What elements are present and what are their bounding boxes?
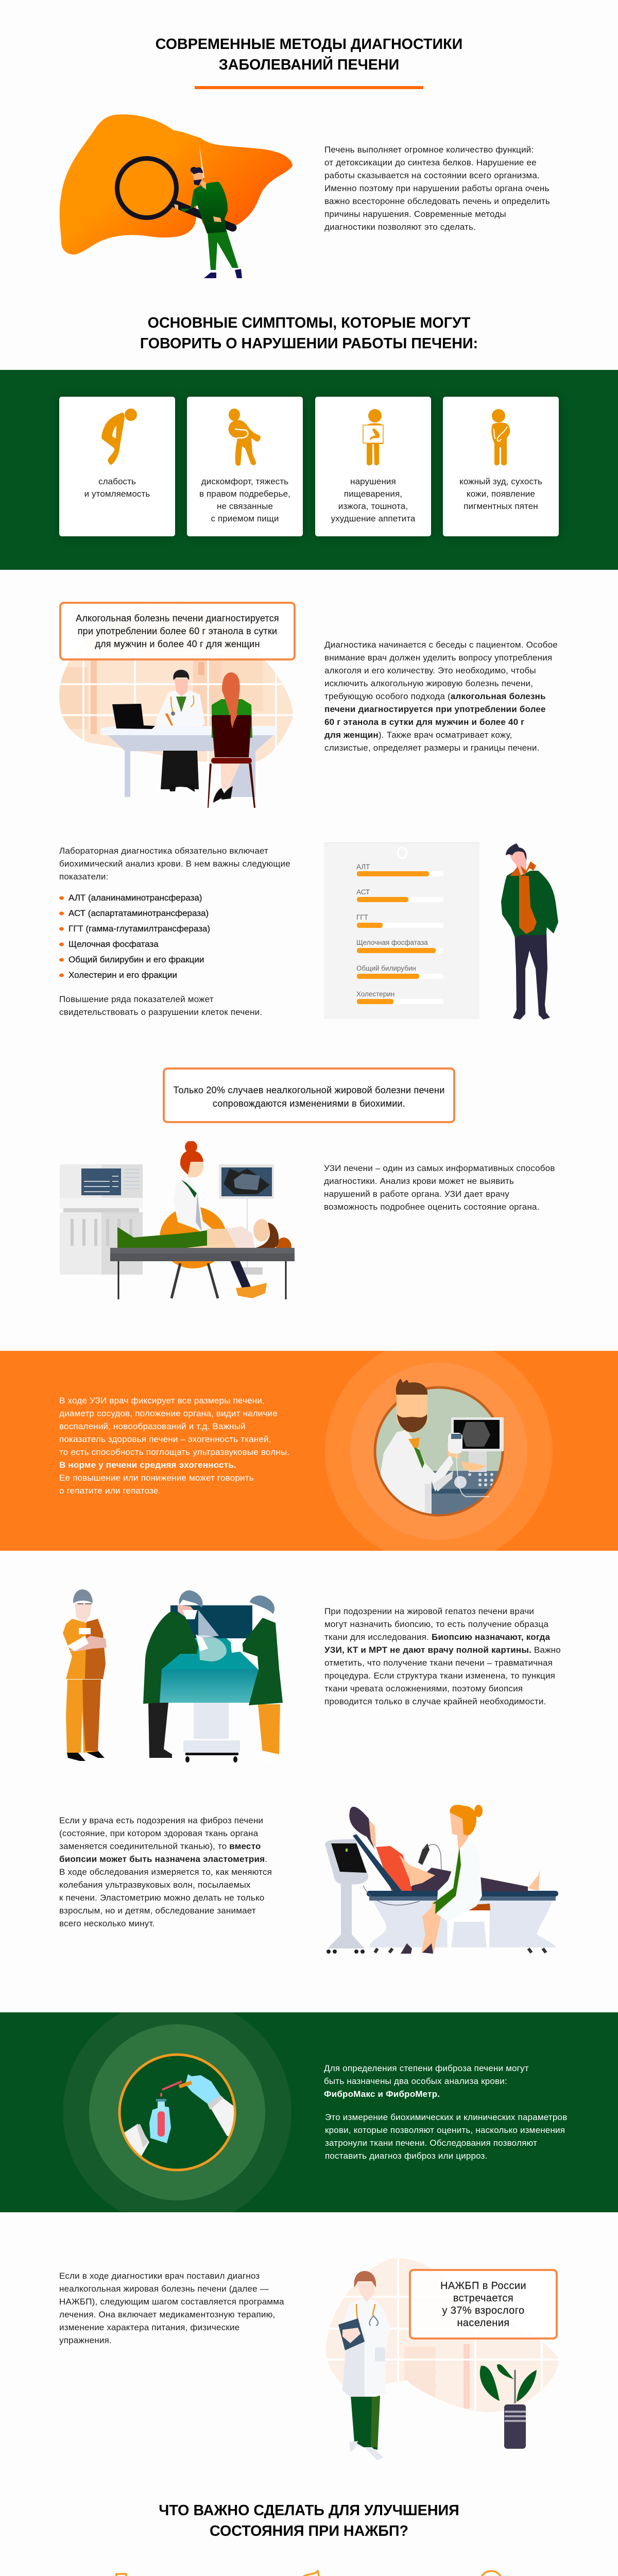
list: blood markers: Общий билирубин и его фракции <box>68 955 204 964</box>
text: elastometry: (состояние, при котором здоровая ткань органа <box>59 1828 258 1838</box>
panel: blood test chart <box>324 842 479 1019</box>
text: ultrasound: УЗИ печени – один из самых информативных способов <box>324 1163 555 1173</box>
text: diagnostics conversation: исключить алкогольную жировую болезнь печени, <box>324 679 533 688</box>
operating screen <box>170 1605 252 1638</box>
text: elastometry: колебания ультразвуковых волн, посылаемых <box>59 1880 251 1890</box>
chart: marker bars: ГГТ <box>356 913 368 921</box>
icon: healthy food <box>115 2573 127 2576</box>
callout: prevalence: НАЖБП в России <box>440 2280 526 2292</box>
patient <box>349 1807 540 1892</box>
heading: what to do: СОСТОЯНИЯ ПРИ НАЖБП? <box>210 2523 408 2539</box>
list: blood markers: АЛТ (аланинаминотрансфераза) <box>68 893 202 903</box>
card: discomfort <box>187 397 303 536</box>
icon: figure with stomach <box>363 409 384 466</box>
text: fibromax details: поставить диагноз фиброз или цирроз. <box>325 2151 488 2161</box>
callout: alcohol threshold: Алкогольная болезнь печени диагностируется <box>76 613 279 623</box>
monitor on stand <box>325 1839 368 1954</box>
title: ЗАБОЛЕВАНИЙ ПЕЧЕНИ <box>219 57 399 73</box>
text: ultrasound: возможность подробнее оценить состояние органа. <box>324 1202 540 1212</box>
card: skin <box>443 397 559 536</box>
text: lab diagnostics: биохимический анализ крови. В нем важны следующие <box>59 859 290 869</box>
text: fibromax details <box>325 2112 567 2161</box>
list: blood markers: АСТ (аспартатаминотрансфераза) <box>68 908 209 918</box>
illustration: doctor and patient at desk <box>59 657 293 808</box>
concentric circles <box>63 2012 291 2212</box>
callout: 20 percent: Только 20% случаев неалкогольной жировой болезни печени <box>173 1085 445 1095</box>
illustration: biopsy surgeons <box>63 1589 283 1762</box>
card: weakness <box>59 397 175 536</box>
text: biopsy: отметить, что получение ткани печени – травматичная <box>324 1658 553 1668</box>
callout: 20 percent: сопровождаются изменениями в биохимии. <box>213 1098 405 1109</box>
standing surgeon <box>63 1589 107 1761</box>
callout: 20 percent <box>163 1067 455 1123</box>
text: treatment: лечения. Она включает медикаментозную терапию, <box>59 2310 275 2319</box>
text: ultrasound details: В ходе УЗИ врач фиксирует все размеры печени, <box>59 1396 265 1405</box>
text: ultrasound details <box>59 1396 289 1496</box>
text: biopsy: При подозрении на жировой гепатоз печени врачи <box>324 1606 534 1616</box>
panel: symptoms band <box>0 370 618 570</box>
card: discomfort: с приемом пищи <box>211 514 279 523</box>
text: fibromax <box>324 2063 529 2099</box>
examination table <box>110 1248 295 1299</box>
intro text: от детоксикации до синтеза белков. Нарушение ее <box>324 158 537 167</box>
text: elastometry: В ходе обследования измеряется то, как меняются <box>59 1867 272 1877</box>
text: diagnostics conversation: требующую особого подхода (алкогольная болезнь <box>324 691 546 701</box>
text: lab diagnostics: показатели: <box>59 872 108 882</box>
heading: symptoms: ГОВОРИТЬ О НАРУШЕНИИ РАБОТЫ ПЕЧЕНИ: <box>140 335 478 352</box>
desk <box>101 726 277 797</box>
list: blood markers: ГГТ (гамма-глутамилтрансфераза) <box>68 924 210 934</box>
text: lab diagnostics <box>59 846 290 882</box>
table and drape <box>159 1610 265 1762</box>
icon: runner <box>303 2570 320 2576</box>
text: diagnostics conversation: для женщин). Также врач осматривает кожу, <box>324 730 512 740</box>
intro text: важно всесторонне обследовать печень и определить <box>324 196 550 206</box>
card: weakness: слабость <box>98 477 136 486</box>
upper glove and sleeve <box>185 2074 221 2105</box>
intro text <box>324 145 550 232</box>
intro text: причины нарушения. Современные методы <box>324 209 506 219</box>
heading: what to do: ЧТО ВАЖНО СДЕЛАТЬ ДЛЯ УЛУЧШЕНИЯ <box>159 2502 459 2519</box>
doctor head <box>396 1379 427 1448</box>
ultrasound machine <box>60 1164 143 1275</box>
text: biopsy: УЗИ, КТ и МРТ не дают врачу полной картины. Важно <box>324 1645 561 1655</box>
right surgeon <box>231 1596 283 1761</box>
text: elevated markers <box>59 994 262 1017</box>
illustration: doctor with plant <box>326 2258 559 2460</box>
text: elastometry: биопсии может быть назначена эластометрия. <box>59 1854 267 1864</box>
callout: alcohol threshold: для мужчин и более 40 г для женщин <box>95 639 260 649</box>
text: biopsy: процедура. Если структура ткани изменена, то пункция <box>324 1671 555 1681</box>
text: diagnostics conversation: печени диагностируется при употреблении более <box>324 704 546 714</box>
text: ultrasound details: диаметр сосудов, положение органа, видит наличие <box>59 1409 278 1418</box>
text: biopsy: ткани чревата осложнениями, поэтому биопсия <box>324 1684 523 1693</box>
text: biopsy <box>324 1606 561 1706</box>
text: ultrasound: нарушений в работе органа. УЗИ дает врачу <box>324 1189 509 1199</box>
text: diagnostics conversation: 60 г этанола в сутки для мужчин и более 40 г <box>324 717 524 727</box>
card: discomfort: дискомфорт, тяжесть <box>201 477 288 486</box>
text: ultrasound details: то есть способность поглощать ультразвуковые волны. <box>59 1447 289 1457</box>
card: skin: пигментных пятен <box>464 501 538 511</box>
callout: prevalence: у 37% взрослого <box>442 2305 524 2316</box>
text: elastometry: Если у врача есть подозрения на фиброз печени <box>59 1816 263 1825</box>
card: skin: кожный зуд, сухость <box>459 477 542 486</box>
intro text: работы сказывается на состоянии всего организма. <box>324 171 540 180</box>
icon: figure scratching skin <box>491 409 510 466</box>
card: digestion: ухудшение аппетита <box>331 514 415 523</box>
text: ultrasound details: воспалений, новообразований и т.д. Важный <box>59 1421 246 1431</box>
text: elastometry: к печени. Эластометрию можно делать не только <box>59 1893 264 1903</box>
ultrasound screen <box>451 1417 504 1451</box>
text: ultrasound details: о гепатите или гепатозе. <box>59 1486 161 1496</box>
doctor <box>156 670 205 792</box>
callout: prevalence <box>409 2269 558 2340</box>
text: elastometry: заменяется соединительной тканью), то вместо <box>59 1841 261 1851</box>
magnifying glass <box>117 159 233 228</box>
text: diagnostics conversation: внимание врач должен уделить вопросу употребления <box>324 653 552 663</box>
text: diagnostics conversation <box>324 640 558 753</box>
illustration: liver with man and magnifying glass <box>60 114 293 278</box>
card: skin: кожи, появление <box>467 489 535 499</box>
sonographer <box>363 1805 490 1954</box>
intro text: диагностики позволяют это сделать. <box>324 222 476 232</box>
text: fibromax details: крови, которые позволяют оценить, насколько изменения <box>325 2125 565 2135</box>
patient on table <box>117 1219 291 1256</box>
chart: marker bars: Холестерин <box>356 990 394 998</box>
illustration: elastometry scene <box>325 1805 558 1954</box>
text: diagnostics conversation: слизистые, определяет размеры и границы печени. <box>324 743 540 753</box>
text: ultrasound details: Ее повышение или понижение может говорить <box>59 1473 254 1483</box>
callout: prevalence: встречается <box>453 2293 513 2304</box>
illustration: man in green jacket <box>501 843 558 1020</box>
window background <box>324 2257 560 2416</box>
icon: figure holding side <box>229 409 261 466</box>
text: ultrasound details: показатель здоровья печени – эхогенность тканей, <box>59 1434 271 1444</box>
dropper <box>160 2081 192 2097</box>
window background <box>59 657 293 761</box>
text: treatment: Если в ходе диагностики врач поставил диагноз <box>59 2271 260 2281</box>
nurse <box>160 1141 267 1298</box>
text: treatment: НАЖБП), следующим шагом составляется программа <box>59 2297 284 2307</box>
couch <box>367 1891 558 1953</box>
chart: marker bars: Щелочная фосфатаза <box>356 939 428 946</box>
concentric circles <box>325 1351 553 1551</box>
test tube <box>156 2099 166 2137</box>
illustration: sonographer portrait <box>374 1379 504 1517</box>
hand with probe <box>447 1433 489 1497</box>
panel: green band <box>0 2012 618 2212</box>
card: digestion: изжога, тошнота, <box>338 501 408 511</box>
illustration: test tube and dropper <box>118 2054 236 2171</box>
card: digestion: нарушения <box>350 477 396 486</box>
list: blood markers: Щелочная фосфатаза <box>68 939 159 949</box>
illustration: ultrasound scene <box>60 1141 295 1299</box>
card: discomfort: не связанные <box>217 501 273 511</box>
chart: marker bars: АСТ <box>356 888 370 896</box>
text: elevated markers: Повышение ряда показателей может <box>59 994 214 1004</box>
text: biopsy: проводится только в случае крайней необходимости. <box>324 1697 546 1706</box>
text: fibromax: ФиброМакс и ФиброМетр. <box>324 2089 440 2099</box>
liver shape <box>60 114 293 255</box>
text: fibromax details: Это измерение биохимических и клинических параметров <box>325 2112 567 2122</box>
text: diagnostics conversation: Диагностика начинается с беседы с пациентом. Особое <box>324 640 558 650</box>
chart: marker bars <box>356 863 443 1004</box>
text: treatment: упражнения. <box>59 2335 112 2345</box>
laptop <box>112 704 155 729</box>
plant <box>480 2364 537 2449</box>
text: elastometry <box>59 1816 272 1928</box>
card: digestion <box>315 397 431 536</box>
lower glove and sleeve <box>149 2106 171 2143</box>
text: elastometry: взрослым, но и детям, обследование занимает <box>59 1906 256 1916</box>
heading: symptoms <box>140 315 478 352</box>
text: treatment <box>59 2271 284 2345</box>
heading: symptoms: ОСНОВНЫЕ СИМПТОМЫ, КОТОРЫЕ МОГУТ <box>148 315 470 331</box>
man <box>174 167 242 278</box>
doctor <box>338 2271 390 2460</box>
callout: alcohol threshold: при употреблении более 60 г этанола в сутки <box>78 626 277 636</box>
icon: capsules <box>481 2570 502 2576</box>
icon: bent figure <box>101 409 137 465</box>
text: fibromax: быть назначены два особых анализа крови: <box>324 2076 507 2086</box>
list: blood markers <box>59 893 210 980</box>
list: blood markers: Холестерин и его фракции <box>68 970 177 980</box>
card: weakness: и утомляемость <box>84 489 150 499</box>
text: biopsy: ткани для исследования. Биопсию назначают, когда <box>324 1632 550 1642</box>
patient on chair <box>208 672 255 808</box>
chart: marker bars: Общий билирубин <box>356 964 416 972</box>
heading: what to do <box>159 2502 459 2539</box>
callout: prevalence: населения <box>457 2317 510 2329</box>
text: ultrasound <box>324 1163 555 1212</box>
text: elastometry: всего несколько минут. <box>59 1919 155 1928</box>
scan monitor <box>219 1164 274 1275</box>
text: biopsy: могут назначить биопсию, то есть получение образца <box>324 1619 548 1629</box>
text: elevated markers: свидетельствовать о разрушении клеток печени. <box>59 1007 262 1017</box>
text: treatment: изменение характера питания, физические <box>59 2323 239 2332</box>
text: ultrasound: диагностики. Анализ крови может не выявить <box>324 1176 514 1186</box>
text: lab diagnostics: Лабораторная диагностика обязательно включает <box>59 846 268 856</box>
text: ultrasound details: В норме у печени средняя эхогенность. <box>59 1460 236 1470</box>
title <box>156 36 462 73</box>
left surgeon <box>143 1590 208 1758</box>
text: fibromax details: затронули ткани печени. Обследования позволяют <box>325 2138 537 2148</box>
card: discomfort: в правом подреберье, <box>199 489 290 499</box>
text: fibromax: Для определения степени фиброза печени могут <box>324 2063 529 2073</box>
title: СОВРЕМЕННЫЕ МЕТОДЫ ДИАГНОСТИКИ <box>156 36 462 53</box>
intro text: Печень выполняет огромное количество функций: <box>324 145 534 155</box>
text: diagnostics conversation: алкоголя и его количеству. Это необходимо, чтобы <box>324 666 536 675</box>
text: treatment: неалкогольная жировая болезнь печени (далее — <box>59 2284 269 2294</box>
card: digestion: пищеварения, <box>344 489 402 499</box>
callout: alcohol threshold <box>59 602 296 660</box>
chart: marker bars: АЛТ <box>356 863 370 871</box>
intro text: Именно поэтому при нарушении работы органа очень <box>324 183 550 193</box>
panel: orange band <box>0 1351 618 1551</box>
